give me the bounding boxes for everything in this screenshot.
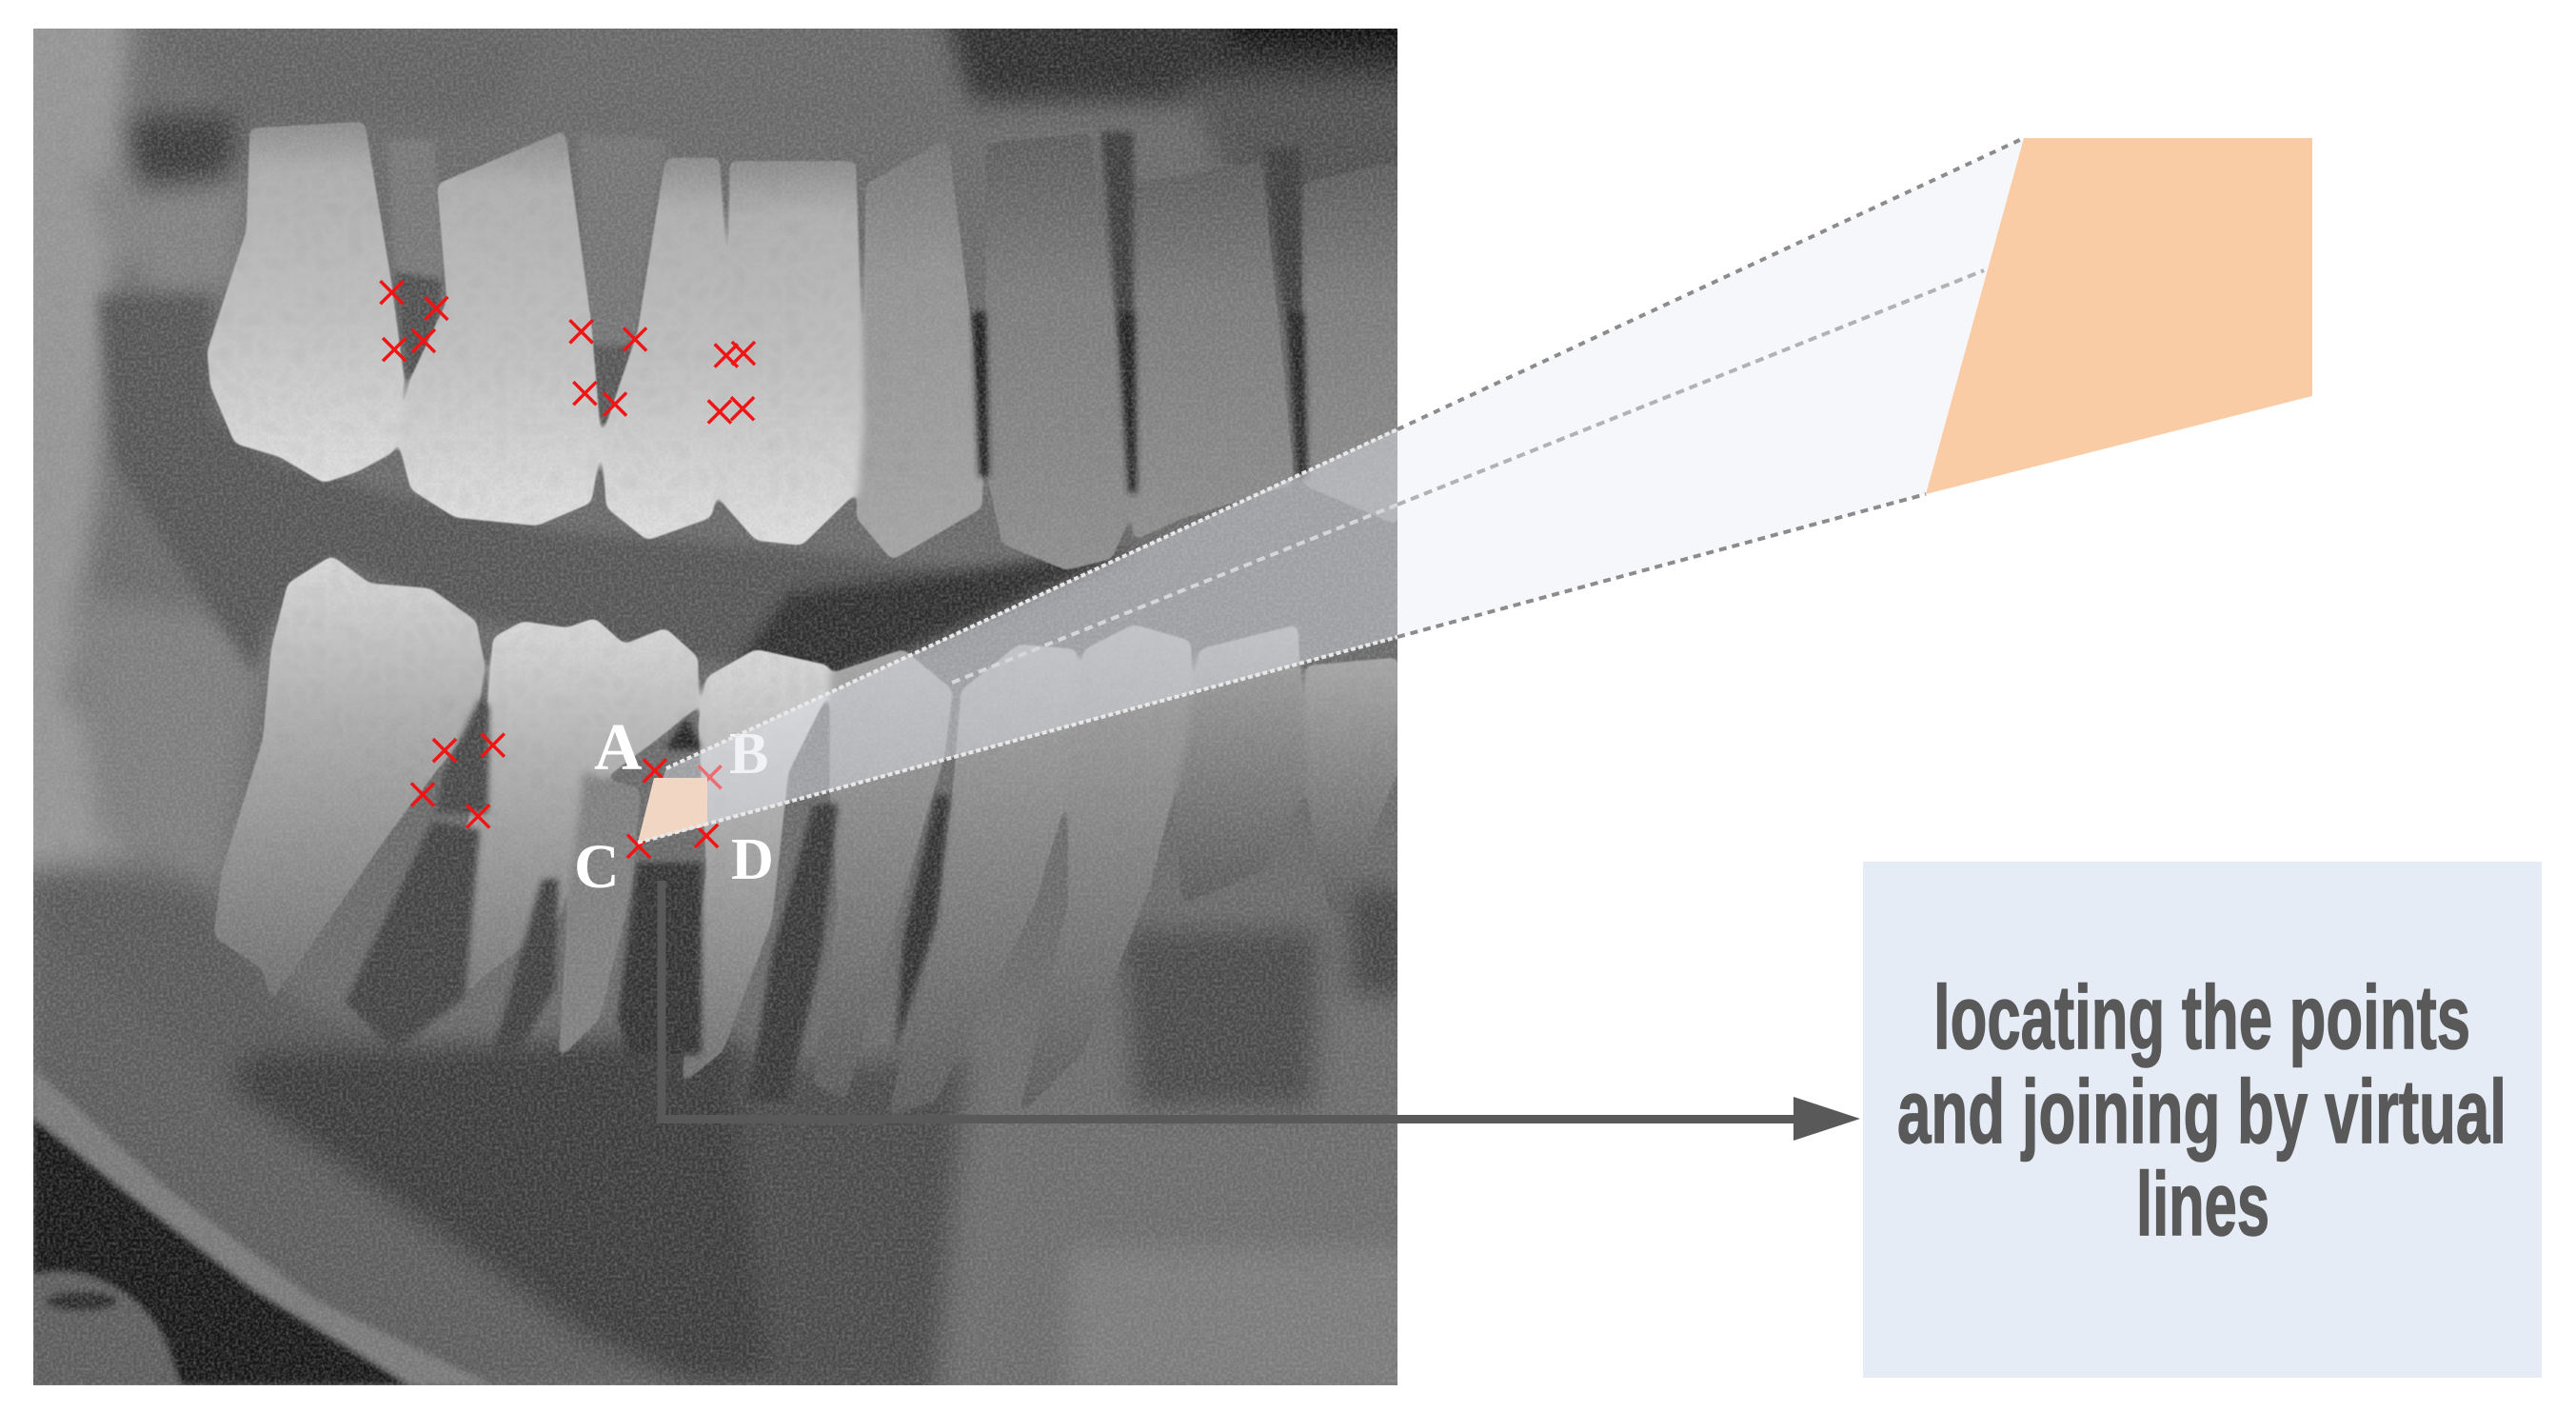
caption text [1897,967,2507,1255]
bone mottling [211,308,849,704]
panorama x-ray image [0,0,1429,1397]
label: D: D [731,827,774,892]
peach region ABCD [638,778,707,843]
upper interdental bone [388,137,663,426]
caption box [1863,862,2542,1378]
lower teeth [213,555,1398,1118]
dashed projection lines [638,138,2024,843]
dark gaps between upper teeth [973,131,1308,493]
arrow from region to caption [662,881,1860,1141]
upper teeth [207,122,1398,570]
red point markers [381,281,755,858]
mandible lower border [33,1068,493,1385]
caption text: lines [2136,1154,2269,1255]
zoom wedge from ABCD region to enlarged shape [638,138,2024,843]
oral cavity [99,296,1139,684]
film grain [33,28,1398,1385]
label: C: C [574,832,620,902]
enlarged orange region [1926,138,2312,494]
label: A: A [594,711,643,785]
lower interdental bone [345,698,950,1101]
label: B: B [729,722,768,786]
